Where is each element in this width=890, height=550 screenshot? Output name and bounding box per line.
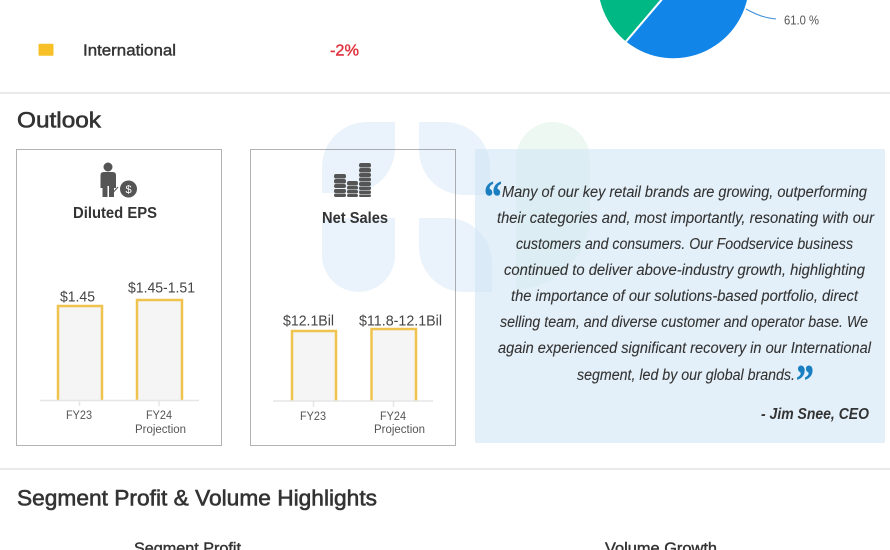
bar chart: EPS: $1.45-1.51: [128, 280, 195, 296]
bar chart: Net Sales: $11.8-12.1Bil: [359, 314, 442, 330]
watermark logo: [322, 122, 590, 292]
quote text: segment, led by our global brands.: [577, 367, 795, 384]
title: Diluted EPS: Diluted EPS: [73, 205, 157, 222]
opening quote mark: “: [484, 171, 502, 222]
bar chart: EPS: Projection: [135, 424, 186, 436]
pie chart: 61.0 %: [784, 14, 819, 28]
bar chart: Net Sales: $12.1Bil: [283, 314, 334, 330]
closing quote mark: ”: [796, 355, 814, 406]
pie chart: [598, 0, 819, 58]
legend row: International: International: [83, 42, 176, 60]
quote text: the importance of our solutions-based portfolio, direct: [511, 288, 859, 305]
icon: coin stacks: [334, 163, 371, 197]
bar chart: EPS: $1.45: [60, 290, 95, 306]
quote text: continued to deliver above-industry growth, highlighting: [504, 262, 865, 279]
title: Net Sales: Net Sales: [322, 210, 388, 227]
panel: Net Sales: [250, 150, 456, 446]
legend row: International: [38, 42, 359, 60]
bar chart: Net Sales: FY24: [380, 411, 407, 423]
legend row: International: -2%: [330, 42, 359, 60]
icon: person with dollar coin: $: [125, 184, 132, 196]
bar chart: Net Sales: [273, 314, 442, 436]
quote text: customers and consumers. Our Foodservice business: [516, 236, 853, 253]
quote text: Many of our key retail brands are growing, outperforming: [502, 184, 867, 201]
quote text: their categories and, most importantly, resonating with our: [497, 210, 875, 227]
panel: CEO quote: [475, 149, 885, 443]
bar chart: Net Sales: Projection: [374, 424, 425, 436]
quote text: again experienced significant recovery in our International: [498, 340, 872, 357]
quote text: [497, 184, 875, 384]
quote attribution: - Jim Snee, CEO: [761, 406, 869, 423]
heading: Segment Profit & Volume Highlights: Segment Profit & Volume Highlights: [17, 486, 377, 510]
panel: Diluted EPS: [16, 150, 222, 446]
heading: Outlook: Outlook: [17, 108, 102, 132]
quote text: selling team, and diverse customer and operator base. We: [500, 314, 868, 331]
bar chart: EPS: FY23: [66, 410, 92, 422]
bar chart: EPS: FY24: [146, 410, 173, 422]
bar chart: EPS: [40, 280, 199, 436]
bar chart: Net Sales: FY23: [300, 411, 326, 423]
icon: person with dollar coin: [100, 162, 137, 198]
